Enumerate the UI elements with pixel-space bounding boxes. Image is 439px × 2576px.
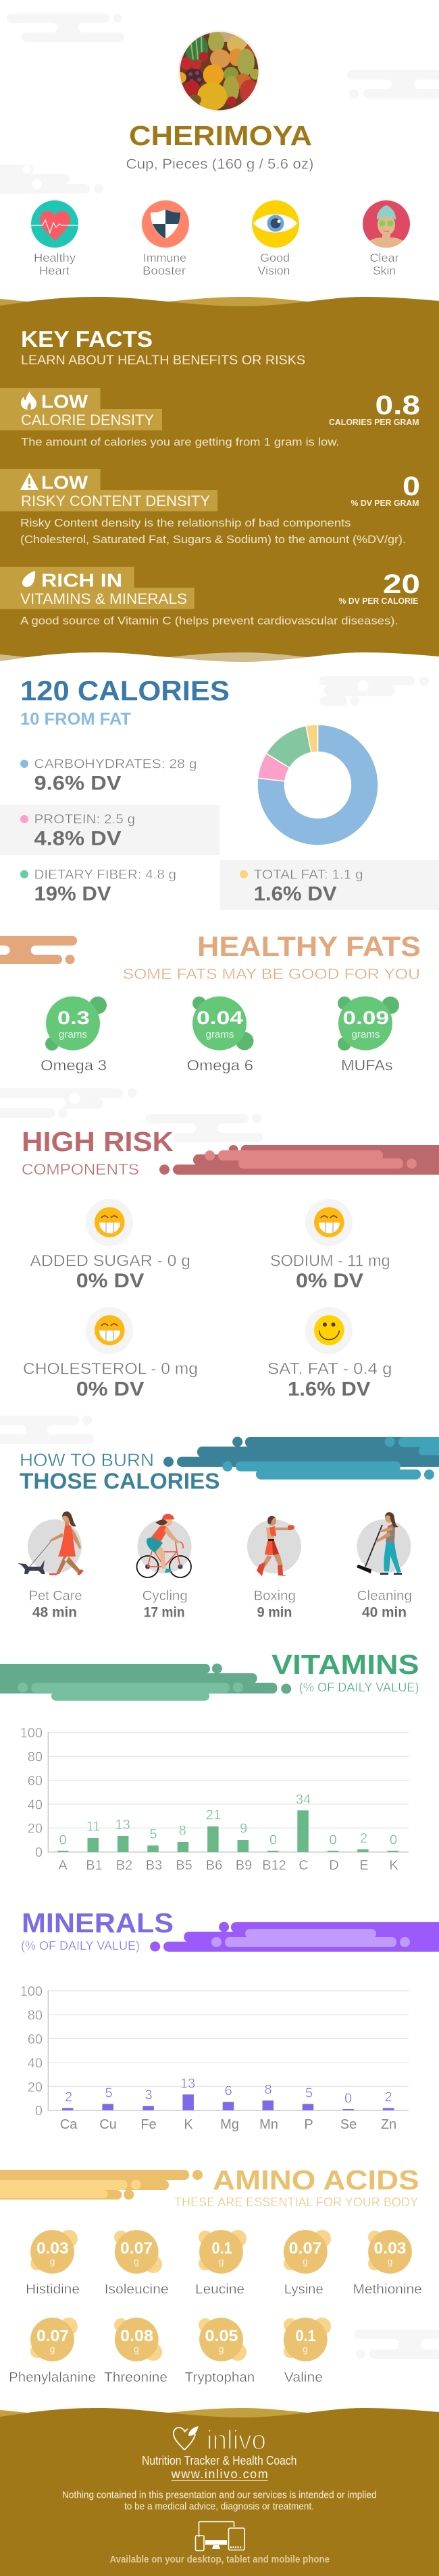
- fact: risky content density: (Cholesterol, Saturated Fat, Sugars & Sodium) to the amount (%DV/gr).: [20, 533, 406, 546]
- fact: calorie density: CALORIES PER GRAM: [329, 418, 419, 427]
- footer: [0, 2408, 439, 2576]
- activity: boxing: [247, 1515, 301, 1621]
- fact: rich in vitamins and minerals: A good source of Vitamin C (helps prevent cardiovascular diseases).: [20, 615, 398, 627]
- amino: isoleucine: [105, 2230, 169, 2297]
- fact: rich in vitamins and minerals: RICH IN: [41, 569, 122, 590]
- fact: risky content density: LOW: [41, 472, 88, 493]
- amino: threonine: 0.08: [120, 2327, 153, 2345]
- bar chart: minerals: Mn: [259, 2117, 278, 2132]
- activity: cleaning: [357, 1512, 412, 1621]
- legend: protein: PROTEIN: 2.5 g: [34, 813, 135, 827]
- amino: methionine: Methionine: [353, 2282, 422, 2297]
- bar chart: vitamins: 60: [28, 1774, 43, 1789]
- logo: inlivo: inlivo: [207, 2426, 266, 2455]
- heading: calories: 120 CALORIES: [20, 675, 230, 706]
- bar chart: vitamins: B1: [86, 1858, 103, 1873]
- disclaimer: [62, 2490, 377, 2512]
- risk item: added sugar: [30, 1199, 190, 1292]
- fat: mufas: [338, 997, 399, 1074]
- amino: phenylalanine: Phenylalanine: [9, 2370, 96, 2385]
- amino: isoleucine: Isoleucine: [105, 2282, 169, 2297]
- fact: risky content density: Risky Content density is the relationship of bad components: [20, 517, 351, 530]
- heading: how to burn: HOW TO BURN: [20, 1450, 154, 1470]
- bar chart: vitamins: 21: [206, 1808, 221, 1823]
- legend: dietary fiber: 19% DV: [34, 883, 111, 905]
- amino: methionine: g: [388, 2256, 392, 2267]
- benefit labels: Skin: [373, 264, 396, 277]
- amino: isoleucine: g: [134, 2256, 139, 2267]
- fat: omega 6: 0.04: [197, 1007, 244, 1028]
- amino: tryptophan: Tryptophan: [185, 2370, 255, 2385]
- activity: pet care: 48 min: [32, 1605, 77, 1621]
- panel: key facts: [0, 297, 439, 686]
- subheading: SOME FATS MAY BE GOOD FOR YOU: [123, 965, 420, 982]
- bar chart: vitamins: 5: [149, 1827, 157, 1842]
- panel: how to burn those calories: [18, 1437, 439, 1621]
- amino: threonine: g: [134, 2344, 139, 2355]
- bar chart: vitamins: C: [299, 1858, 309, 1873]
- amino: leucine: Leucine: [195, 2282, 244, 2297]
- icon: flame: [21, 391, 36, 410]
- banner graphic: [0, 2170, 203, 2200]
- subheading: percent of daily value: (% OF DAILY VALUE): [21, 1938, 140, 1953]
- amino: isoleucine: 0.07: [120, 2239, 153, 2258]
- food photo: [176, 28, 263, 113]
- activity: cycling: [136, 1514, 192, 1621]
- legend: total fat: 1.6% DV: [254, 883, 337, 905]
- bar chart: vitamins: 34: [296, 1792, 311, 1807]
- legend: carbohydrates: CARBOHYDRATES: 28 g: [34, 757, 197, 771]
- bar chart: minerals: 13: [180, 2076, 195, 2091]
- bar chart: vitamins: 0: [269, 1832, 277, 1847]
- bar chart: minerals: 60: [28, 2032, 43, 2047]
- fact: rich in vitamins and minerals: % DV PER CALORIE: [339, 596, 418, 606]
- amino: lysine: g: [303, 2256, 308, 2267]
- bar chart: minerals: 2: [384, 2090, 392, 2104]
- bar chart: vitamins: 2: [360, 1831, 367, 1846]
- bar chart: vitamins: 20: [28, 1822, 43, 1837]
- activity: cycling: 17 min: [144, 1605, 185, 1621]
- icon: warning triangle: [20, 473, 38, 490]
- risk item: sodium: [270, 1199, 390, 1292]
- heading: vitamins: VITAMINS: [272, 1649, 419, 1680]
- risk item: saturated fat: SAT. FAT - 0.4 g: [267, 1360, 392, 1378]
- activity: boxing: Boxing: [254, 1589, 296, 1604]
- legend: dietary fiber: DIETARY FIBER: 4.8 g: [34, 868, 176, 883]
- serving subtitle: Cup, Pieces (160 g / 5.6 oz): [126, 157, 313, 172]
- bar chart: vitamins: 0: [329, 1832, 337, 1847]
- icon: healthy heart: [31, 200, 78, 248]
- bar chart: vitamins: K: [389, 1858, 398, 1873]
- bar chart: minerals: 6: [224, 2083, 232, 2098]
- risk item: saturated fat: [267, 1307, 392, 1400]
- bar chart: minerals: Se: [340, 2117, 357, 2132]
- fat: omega 3: 0.3: [57, 1007, 90, 1028]
- bar chart: vitamins: 80: [28, 1750, 43, 1765]
- subheading: components: COMPONENTS: [22, 1160, 139, 1178]
- bar chart: minerals: P: [304, 2117, 313, 2132]
- benefit labels: [34, 251, 399, 277]
- panel: healthy fats: [0, 930, 421, 1074]
- donut chart: [257, 725, 378, 845]
- subheading: LEARN ABOUT HEALTH BENEFITS OR RISKS: [21, 353, 305, 368]
- amino: valine: 0.1: [296, 2327, 316, 2345]
- icon: good vision eye: [252, 200, 299, 248]
- disclaimer: Nothing contained in this presentation and our services is intended or implied: [62, 2490, 377, 2501]
- amino: lysine: Lysine: [284, 2282, 324, 2297]
- fat: omega 3: grams: [59, 1029, 87, 1040]
- tagline: Nutrition Tracker & Health Coach: [142, 2454, 296, 2467]
- heading: minerals: MINERALS: [22, 1907, 174, 1938]
- activity: cycling: Cycling: [143, 1589, 188, 1604]
- activity: cleaning: Cleaning: [357, 1589, 412, 1604]
- amino: valine: g: [303, 2344, 308, 2355]
- bar chart: vitamins: 8: [179, 1823, 186, 1838]
- heading: those calories: THOSE CALORIES: [20, 1469, 220, 1494]
- fact: calorie density: CALORIE DENSITY: [21, 412, 154, 428]
- bar chart: minerals: 20: [28, 2080, 43, 2095]
- bar chart: minerals: 0: [344, 2092, 352, 2106]
- website link: www.inlivo.com: [171, 2467, 268, 2481]
- banner graphic: [163, 1437, 439, 1480]
- amino: tryptophan: g: [219, 2344, 224, 2355]
- bar chart: minerals: Zn: [381, 2117, 396, 2132]
- amino: phenylalanine: [9, 2318, 96, 2385]
- bar chart: vitamins: B3: [146, 1858, 162, 1873]
- health benefits row: [31, 200, 410, 277]
- icon: immune shield: [142, 200, 189, 248]
- subheading: THESE ARE ESSENTIAL FOR YOUR BODY: [174, 2195, 418, 2209]
- bar chart: vitamins: 11: [86, 1819, 100, 1834]
- panel: calories: [0, 675, 439, 910]
- bar chart: minerals: 8: [264, 2082, 272, 2097]
- amino: valine: Valine: [284, 2370, 323, 2385]
- legend: dietary fiber: [20, 868, 176, 905]
- benefit labels: Immune: [143, 251, 186, 264]
- bar chart: vitamins: 0: [35, 1845, 43, 1860]
- fact: rich in vitamins and minerals: 20: [383, 569, 420, 599]
- bar chart: minerals: 2: [65, 2090, 72, 2104]
- subheading: percent of daily value: (% OF DAILY VALUE): [299, 1680, 419, 1694]
- legend: carbohydrates: 9.6% DV: [34, 773, 122, 795]
- amino: histidine: [26, 2230, 80, 2297]
- fat: omega 3: Omega 3: [41, 1057, 107, 1074]
- activity: pet care: Pet Care: [29, 1589, 82, 1604]
- amino: tryptophan: 0.05: [205, 2327, 238, 2345]
- icon: clear skin face mask: [363, 200, 410, 248]
- bar chart: vitamins: E: [359, 1858, 369, 1873]
- benefit labels: Booster: [143, 264, 186, 277]
- fact: calorie density: [0, 388, 420, 449]
- amino: methionine: [353, 2230, 422, 2297]
- bar chart: minerals: 100: [20, 1984, 43, 1999]
- fat: omega 6: Omega 6: [186, 1057, 253, 1074]
- amino: lysine: [284, 2230, 331, 2297]
- bar chart: vitamins: 0: [390, 1832, 397, 1847]
- risk item: cholesterol: 0% DV: [76, 1378, 145, 1400]
- bar chart: vitamins: 9: [240, 1822, 247, 1837]
- benefit labels: Clear: [370, 251, 399, 264]
- amino: lysine: 0.07: [289, 2239, 321, 2258]
- bar chart: minerals: 0: [35, 2104, 43, 2119]
- risk item: cholesterol: [23, 1307, 198, 1400]
- banner graphic: [150, 1922, 439, 1952]
- amino: leucine: [195, 2230, 247, 2297]
- risk item: cholesterol: CHOLESTEROL - 0 mg: [23, 1360, 198, 1378]
- benefit labels: Good: [260, 251, 290, 264]
- subheading: from fat: 10 FROM FAT: [20, 710, 131, 729]
- amino: leucine: 0.1: [212, 2239, 232, 2258]
- bar chart: minerals: Ca: [60, 2117, 78, 2132]
- heading: amino acids: AMINO ACIDS: [213, 2164, 419, 2195]
- bar chart: vitamins: D: [329, 1858, 339, 1873]
- risk item: sodium: 0% DV: [296, 1270, 363, 1292]
- risk item: saturated fat: 1.6% DV: [288, 1378, 370, 1400]
- amino: tryptophan: [185, 2318, 255, 2385]
- availability note: Available on your desktop, tablet and mobile phone: [109, 2554, 330, 2565]
- heading: key facts: KEY FACTS: [21, 327, 153, 352]
- bar chart: vitamins: [20, 1726, 409, 1873]
- bar chart: minerals: K: [184, 2117, 193, 2132]
- bar chart: vitamins: B6: [206, 1858, 222, 1873]
- bar chart: minerals: 5: [105, 2085, 113, 2100]
- fat: omega 6: [186, 997, 254, 1074]
- benefit labels: Vision: [258, 264, 290, 277]
- amino: threonine: [104, 2318, 167, 2385]
- amino: threonine: Threonine: [104, 2370, 167, 2385]
- legend: protein: 4.8% DV: [34, 827, 122, 849]
- banner graphic: [159, 1145, 439, 1175]
- fat: mufas: grams: [351, 1029, 380, 1040]
- bar chart: vitamins: 100: [20, 1726, 43, 1741]
- icon: leaf: [22, 571, 35, 587]
- panel: minerals: [20, 1907, 439, 2132]
- bar chart: vitamins: 0: [59, 1832, 67, 1847]
- benefit labels: Heart: [39, 264, 70, 277]
- legend: total fat: [240, 868, 363, 905]
- bar chart: vitamins: A: [58, 1858, 68, 1873]
- bar chart: minerals: 80: [28, 2008, 43, 2023]
- legend: total fat: TOTAL FAT: 1.1 g: [254, 868, 363, 883]
- disclaimer: to be a medical advice, diagnosis or treatment.: [124, 2500, 314, 2512]
- banner graphic: [0, 1664, 291, 1701]
- amino: methionine: 0.03: [374, 2239, 407, 2258]
- amino: histidine: Histidine: [26, 2282, 80, 2297]
- icon: devices: [196, 2522, 244, 2550]
- fact: rich in vitamins and minerals: VITAMINS & MINERALS: [20, 590, 187, 607]
- banner graphic: [0, 936, 77, 964]
- amino: histidine: 0.03: [36, 2239, 69, 2258]
- fat: omega 6: grams: [205, 1029, 234, 1040]
- amino: valine: [284, 2318, 331, 2385]
- bar chart: vitamins: B12: [262, 1858, 286, 1873]
- activity: pet care: [18, 1511, 84, 1621]
- title: CHERIMOYA: [129, 120, 312, 151]
- legend: protein: [20, 813, 135, 849]
- fact: risky content density: % DV PER GRAM: [351, 499, 419, 508]
- fact: rich in vitamins and minerals: [0, 567, 420, 627]
- activity: cleaning: 40 min: [362, 1605, 407, 1621]
- fact: risky content density: RISKY CONTENT DENSITY: [21, 493, 210, 509]
- bar chart: minerals: Mg: [220, 2117, 239, 2132]
- bar chart: minerals: 40: [28, 2056, 43, 2071]
- risk item: added sugar: 0% DV: [76, 1270, 145, 1292]
- amino: histidine: g: [50, 2256, 55, 2267]
- legend background panels: [0, 805, 439, 910]
- heading: high risk: HIGH RISK: [22, 1126, 174, 1157]
- bar chart: vitamins: B5: [176, 1858, 192, 1873]
- amino: leucine: g: [219, 2256, 224, 2267]
- panel: amino acids: [0, 2164, 422, 2385]
- activity: boxing: 9 min: [257, 1605, 292, 1621]
- bar chart: minerals: 3: [145, 2088, 153, 2102]
- bar chart: minerals: [20, 1984, 409, 2132]
- amino: phenylalanine: g: [50, 2344, 55, 2355]
- logo: inlivo: [174, 2426, 266, 2455]
- bar chart: vitamins: B2: [116, 1858, 132, 1873]
- fact: calorie density: 0.8: [376, 391, 420, 420]
- bar chart: minerals: Cu: [99, 2117, 117, 2132]
- panel: vitamins: [0, 1649, 419, 1873]
- heading: healthy fats: HEALTHY FATS: [197, 930, 421, 962]
- amino: phenylalanine: 0.07: [36, 2327, 69, 2345]
- risk item: added sugar: ADDED SUGAR - 0 g: [30, 1252, 190, 1270]
- fat: mufas: 0.09: [342, 1007, 389, 1028]
- bar chart: minerals: 5: [305, 2085, 313, 2100]
- fat: omega 3: [41, 997, 107, 1074]
- legend: carbohydrates: [20, 757, 197, 795]
- fact: risky content density: [0, 469, 420, 546]
- risk item: sodium: SODIUM - 11 mg: [270, 1252, 390, 1270]
- panel: high risk components: [22, 1126, 439, 1400]
- fact: calorie density: The amount of calories you are getting from 1 gram is low.: [21, 436, 340, 449]
- bar chart: vitamins: 13: [115, 1818, 130, 1832]
- bar chart: vitamins: B9: [236, 1858, 252, 1873]
- fact: calorie density: LOW: [41, 391, 88, 412]
- bar chart: vitamins: 40: [28, 1797, 43, 1812]
- bar chart: minerals: Fe: [140, 2117, 157, 2132]
- fat: mufas: MUFAs: [341, 1057, 393, 1074]
- benefit labels: Healthy: [34, 251, 76, 264]
- fact: risky content density: 0: [403, 472, 420, 501]
